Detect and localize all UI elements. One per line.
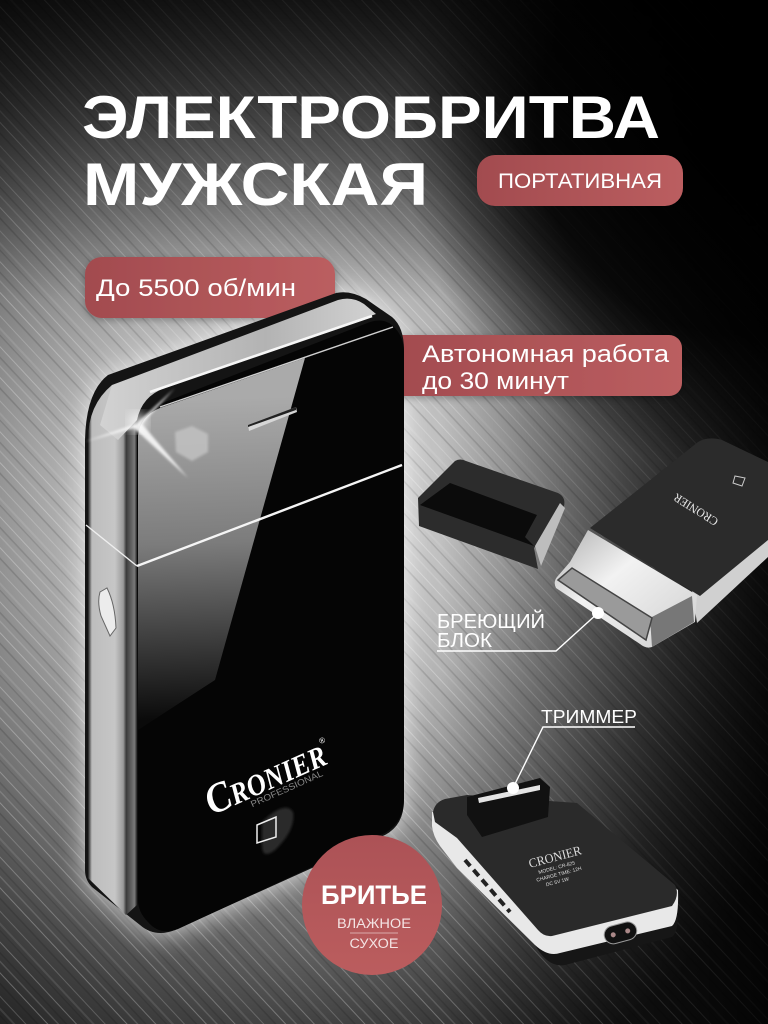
face reflection: [138, 358, 305, 730]
shaving badge circle: ВЛАЖНОЕ: [337, 916, 411, 931]
title: МУЖСКАЯ: [83, 151, 428, 218]
label: trimmer: ТРИММЕР: [541, 707, 637, 727]
silver shaving head: [555, 530, 697, 648]
side button: [99, 588, 116, 636]
badge: speed: [85, 257, 335, 318]
shaver with open head: [555, 438, 768, 648]
shaving badge circle: СУХОЕ: [350, 936, 398, 951]
device side silhouette: [85, 292, 404, 933]
back view bottom shadow: [535, 915, 678, 965]
shaving badge circle: БРИТЬЕ: [321, 880, 427, 910]
back view logo: MODEL: CR-825: [538, 860, 576, 876]
shaving badge circle: [302, 835, 442, 975]
inner top line: [160, 327, 393, 407]
title: [82, 84, 660, 218]
home button: [257, 817, 276, 843]
back view logo: CRONIER: [527, 842, 583, 871]
black front face: [137, 320, 404, 931]
top silver band: [100, 299, 376, 440]
open shaver black body: [590, 438, 768, 596]
foil: [558, 568, 652, 640]
label: trimmer: [507, 707, 637, 794]
label: shaving block: [437, 607, 604, 652]
main shaver: [84, 292, 404, 933]
device glow: [86, 293, 404, 933]
back view logo: DC 5V 1W: [545, 876, 570, 888]
protective cap: [418, 460, 565, 569]
open shaver logo: CRONIER: [671, 490, 721, 529]
label: shaving block: БЛОК: [437, 630, 492, 652]
white top edge highlight: [150, 316, 372, 392]
back view logo: [527, 842, 589, 891]
logo: Cronier: CRONIER: [197, 730, 333, 825]
back view logo: CHARGE TIME: 12H: [536, 866, 583, 884]
badge: portable: [477, 155, 683, 206]
badge: battery life: [390, 335, 682, 396]
charging port: [602, 920, 639, 946]
back view black plate: [433, 795, 677, 936]
label: shaving block: БРЕЮЩИЙ: [437, 609, 545, 633]
logo: Cronier: ®: [318, 735, 327, 746]
trimmer head: [467, 778, 550, 837]
badge: portable: ПОРТАТИВНАЯ: [498, 170, 662, 193]
left silver band: [88, 385, 137, 915]
back view white side: [432, 812, 678, 954]
home button glare: [262, 808, 293, 854]
badge: battery life: до 30 минут: [422, 368, 569, 395]
open shaver home button: [733, 476, 745, 486]
open shaver silver side: [692, 530, 768, 623]
title: ЭЛЕКТРОБРИТВА: [82, 84, 660, 151]
speaker slit: [248, 407, 297, 431]
logo: Cronier: PROFESSIONAL: [249, 768, 324, 809]
trimmer blade: [478, 785, 540, 803]
badge: speed: До 5500 об/мин: [96, 275, 296, 302]
head seam line: [86, 465, 402, 566]
badge: battery life: Автономная работа: [422, 341, 670, 368]
back view switch details: [465, 860, 510, 912]
shaver back view with trimmer: [432, 778, 678, 965]
sparkle and lens flare: [84, 388, 208, 478]
